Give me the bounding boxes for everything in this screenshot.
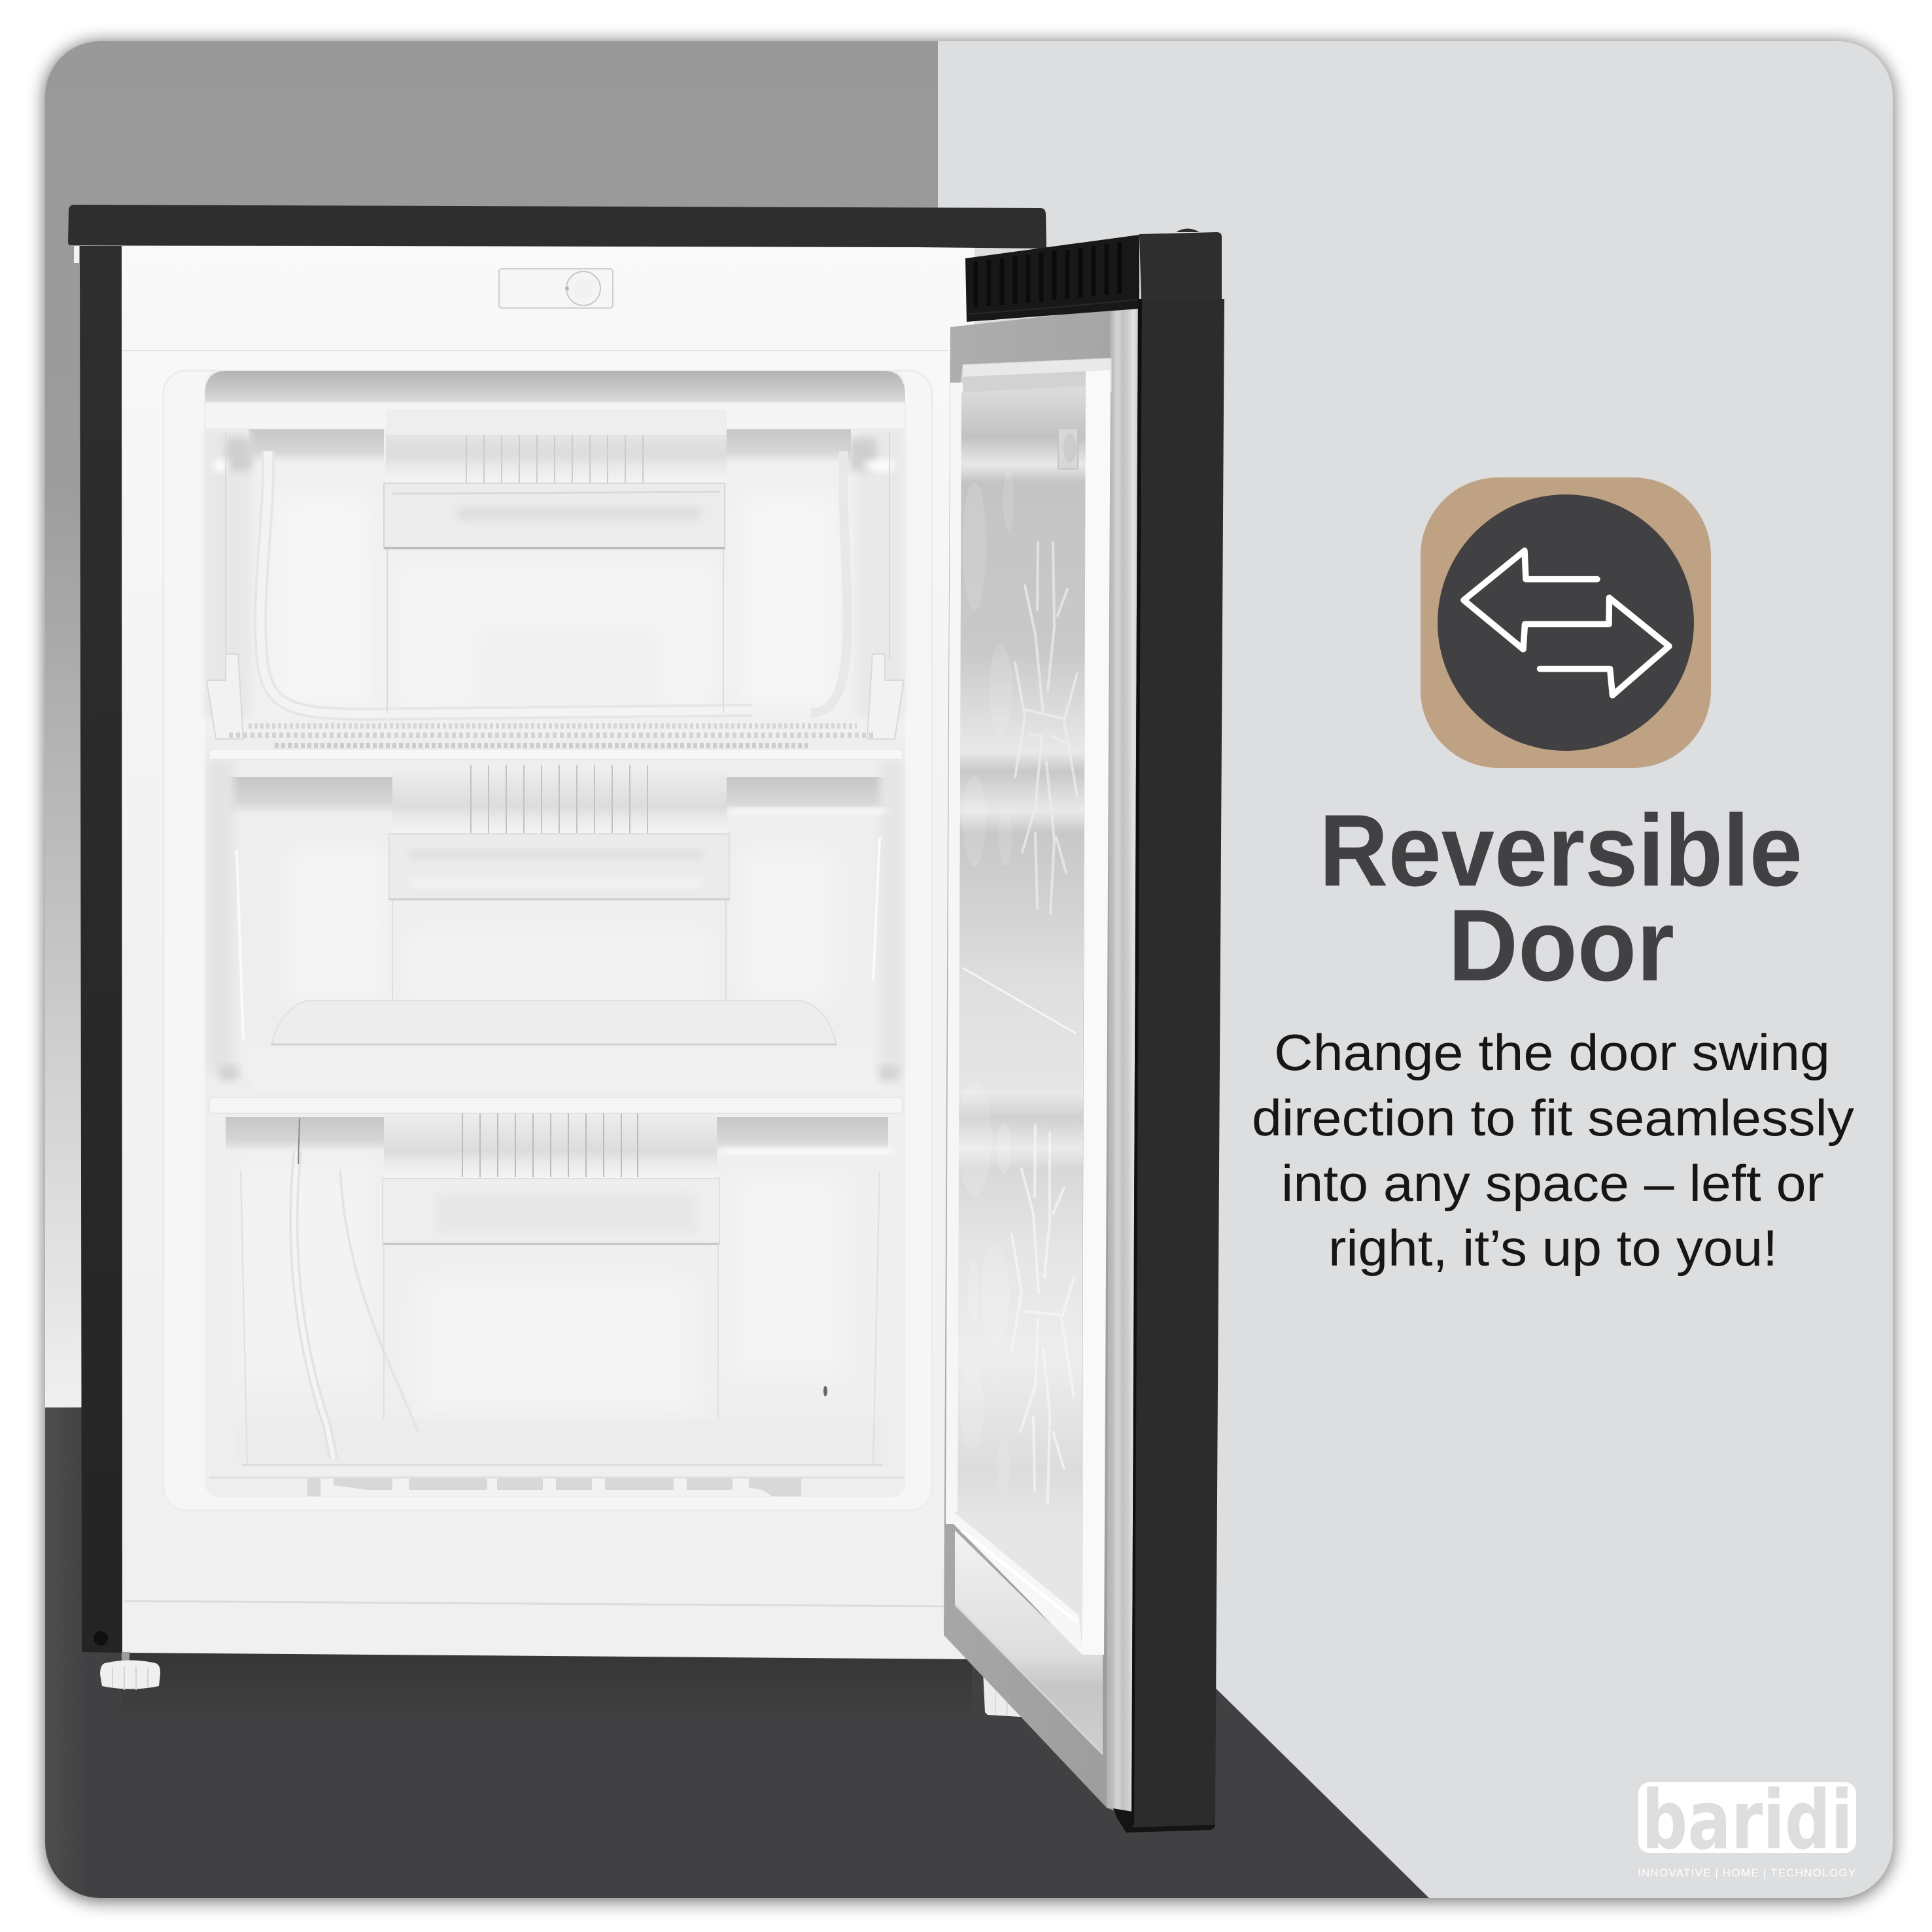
drawer 3 speck xyxy=(823,1386,827,1396)
description text: right, it’s up to you! xyxy=(1328,1219,1778,1277)
description text: direction to fit seamlessly xyxy=(1252,1089,1854,1147)
upper embossed ovals xyxy=(963,469,1014,867)
door hinge bump xyxy=(1176,229,1199,232)
drawer 1 clips xyxy=(207,654,904,739)
door black front xyxy=(1131,299,1224,1829)
drawer 2 bottom corners xyxy=(219,1066,899,1080)
freezer cabinet xyxy=(68,205,1046,1717)
feature icon: reversible arrows xyxy=(1421,477,1711,768)
logo tagline: INNOVATIVE | HOME | TECHNOLOGY xyxy=(1638,1867,1855,1879)
drawer 1 handle front xyxy=(384,483,725,549)
heading: Reversible xyxy=(1319,794,1803,908)
drawer 2 highlights xyxy=(237,808,886,1040)
drawer 3 side bands xyxy=(226,1117,888,1151)
drawer 2 vertical edges xyxy=(392,899,726,1027)
door front dark edge xyxy=(1131,299,1142,1825)
drawer 1 top lip xyxy=(205,402,905,429)
upper seam line xyxy=(122,350,948,351)
small white tab xyxy=(74,246,79,263)
door silver frame xyxy=(944,306,1139,1818)
side panel screw xyxy=(94,1631,108,1646)
heading: Door xyxy=(1448,889,1674,1003)
drawer 1 tube highlight xyxy=(260,451,752,714)
icon tan badge xyxy=(1421,477,1711,768)
drawer 3 handle front xyxy=(383,1179,719,1244)
drawer 3 interior xyxy=(208,1097,904,1478)
drawer 2 handle front xyxy=(389,834,729,899)
door lower panel xyxy=(955,1530,1103,1754)
top black worktop xyxy=(68,205,1046,249)
door label plate xyxy=(1058,428,1078,469)
gasket strip black with ribs xyxy=(965,235,1139,322)
door diagonal shelf line xyxy=(963,968,1076,1033)
drawer 3 bottom edge xyxy=(209,1477,904,1478)
drawer 1 vertical edges xyxy=(226,432,889,713)
drawer 3 tubes xyxy=(294,1118,419,1458)
drawer 2 top lip xyxy=(209,750,903,759)
left adjustable foot xyxy=(100,1652,160,1690)
door panel lower area xyxy=(948,1511,1082,1658)
floor shadow under freezer xyxy=(129,1653,972,1672)
door lower inner edge xyxy=(955,1604,1103,1754)
icon double arrow xyxy=(1464,551,1669,695)
door gasket band xyxy=(1107,306,1139,1812)
drawer 1 refrigerant tube xyxy=(260,451,752,714)
lower embossed snowflake xyxy=(1012,1126,1074,1503)
bottom tray slots xyxy=(307,1477,801,1496)
drawer 1 highlights xyxy=(213,460,895,713)
drawer 2 handle back xyxy=(392,764,727,835)
door ridge highlight xyxy=(963,358,1111,377)
door lower highlight line xyxy=(961,1530,1077,1622)
drawer 3 xyxy=(208,1097,904,1478)
drawer 3 top lip xyxy=(209,1097,903,1113)
door white inner strip left xyxy=(946,383,963,1524)
right adjustable foot xyxy=(983,1671,1030,1717)
drawer 2 xyxy=(208,750,904,1093)
icon dark circle xyxy=(1438,494,1694,751)
drawer 2 front lip xyxy=(245,1046,880,1092)
heading xyxy=(1319,794,1803,1003)
floor xyxy=(44,1407,1429,1898)
drawer 1 ribs xyxy=(466,419,643,484)
drawer 1 handle back xyxy=(386,409,727,485)
drawer 3 handle back xyxy=(384,1109,717,1179)
door bottom black corner xyxy=(1113,1808,1215,1833)
control panel with dial xyxy=(499,269,613,308)
logo white plate xyxy=(1638,1782,1856,1853)
description text: into any space – left or xyxy=(1281,1154,1824,1212)
drawer 1 right tube xyxy=(811,451,848,713)
drawer 2 tray base xyxy=(271,1001,837,1044)
description text: Change the door swing xyxy=(1274,1024,1830,1081)
drawer 2 side bands xyxy=(208,759,903,1073)
door top ridge xyxy=(958,358,1112,399)
base seam xyxy=(124,1601,948,1606)
left wall gradient xyxy=(44,41,938,1407)
description text xyxy=(1252,1024,1854,1277)
lower embossed ovals xyxy=(957,1080,1010,1491)
drawer 1 handle back top xyxy=(386,409,727,435)
interior cavity xyxy=(205,371,905,1497)
drawer 2 interior xyxy=(208,759,904,1093)
drawer 3 floor line xyxy=(242,1464,883,1466)
drawer 3 vertical edges xyxy=(241,1171,880,1465)
logo wordmark: baridi xyxy=(1642,1774,1853,1868)
drawer 1 side bands xyxy=(205,429,904,717)
drawer 2 ribs xyxy=(471,765,647,834)
upper embossed snowflake xyxy=(1015,542,1077,914)
door lower white ridge xyxy=(946,1511,1082,1655)
cabinet left side panel xyxy=(80,246,122,1653)
cabinet white body xyxy=(122,246,975,1659)
brand logo xyxy=(1638,1774,1856,1879)
wire shelf 1 xyxy=(229,726,876,746)
interior liner xyxy=(164,371,932,1510)
door inner panel xyxy=(957,386,1086,1524)
drawer 3 highlights xyxy=(235,1148,893,1465)
door white inner strip right xyxy=(1082,364,1111,1655)
drawer 1 interior xyxy=(205,429,905,736)
drawer 2 tray front line xyxy=(271,1044,837,1045)
drawer 1 xyxy=(205,402,905,746)
open door xyxy=(944,229,1224,1833)
drawer 3 ribs xyxy=(462,1109,638,1177)
cavity top band xyxy=(205,371,905,402)
door top cap xyxy=(1139,232,1222,300)
